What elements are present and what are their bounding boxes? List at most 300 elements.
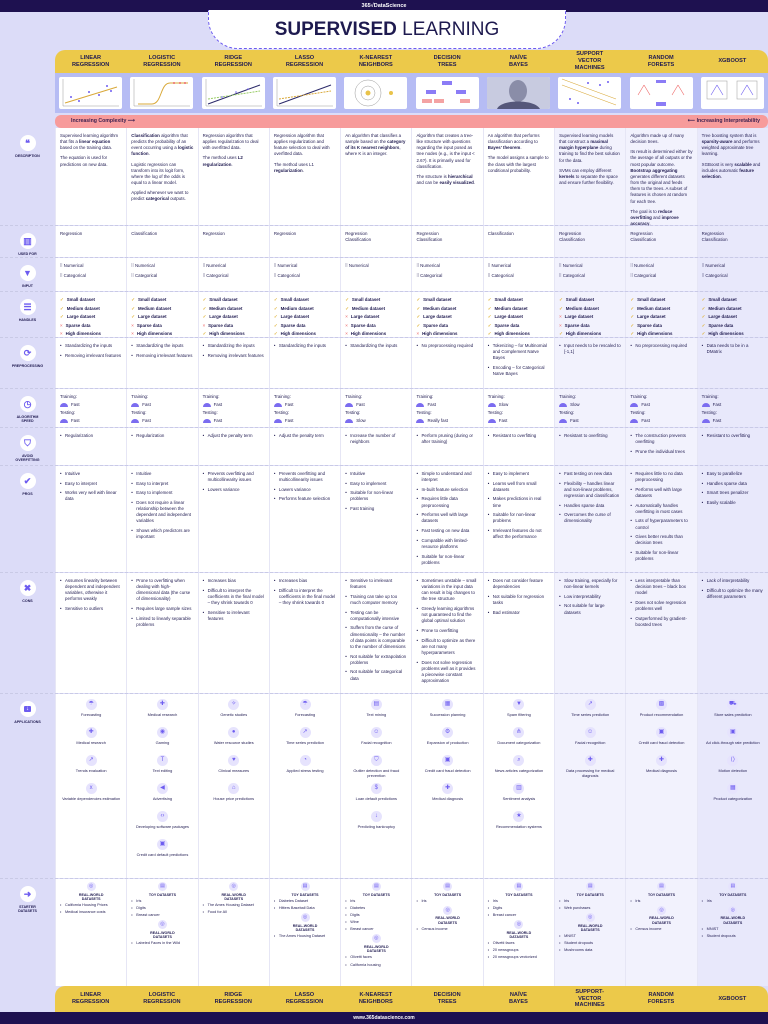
row: description: Regression algorithm that applies regularization to deal with overfitted data. [203, 133, 258, 150]
row: starter datasets: DATASETS [367, 949, 386, 953]
row: description: Supervised learning algorithm that fits a linear equation based on the training data. [60, 133, 118, 150]
thumbnails row [55, 73, 768, 113]
complexity / interpretability bar [55, 115, 768, 128]
row: algorithm speed: Testing: [416, 410, 432, 415]
row: cons: CONS [22, 599, 33, 603]
row: applications: ↓ [375, 813, 378, 819]
row: pros: Prevents overfitting and multicollinearity issues [208, 471, 254, 482]
row: handles: ✓ Small dataset [203, 297, 238, 302]
row: starter datasets: Breast cancer [136, 913, 160, 917]
row: pros: Easily scalable [707, 500, 736, 505]
row: algorithm speed: Slow [570, 402, 580, 407]
row: algorithm speed: Fast [641, 402, 650, 407]
row: pros: Learns well from small datasets [493, 481, 536, 492]
bottom header: algorithm names: NEIGHBORS [359, 999, 393, 1005]
row: algorithm speed: Training: [131, 394, 148, 399]
row: cons [0, 572, 768, 693]
row: starter datasets: Mushrooms data [564, 948, 592, 952]
row: starter datasets [0, 878, 768, 986]
row: starter datasets: REAL-WORLD [221, 892, 246, 896]
row: handles: × Sparse data [203, 323, 233, 328]
row: pros: Easy to implement [493, 471, 529, 476]
row: applications: Time series prediction [571, 712, 609, 717]
row: algorithm speed: Training: [274, 394, 291, 399]
row: applications: Expansion of production [427, 740, 468, 745]
row: handles: ✓ Large dataset [131, 314, 167, 319]
row: starter datasets: Breast cancer [493, 913, 516, 917]
footer: www.365datascience.com [353, 1015, 415, 1021]
row: pros: Fast testing on new data [564, 471, 612, 476]
row: handles: ✓ Small dataset [488, 297, 523, 302]
row: starter datasets: ▤ [303, 883, 307, 889]
row: applications: Succession planning [430, 712, 465, 717]
row: starter datasets: REAL-WORLD [649, 916, 674, 920]
complexity / interpretability bar: ⟵ Increasing Interpretability [688, 118, 760, 124]
row: cons: Prone to overfitting [421, 628, 458, 633]
row: description: Logistic regression can transform into its logit form, where the log of the odds is equal to a linear model. [131, 162, 185, 185]
row: pros: Fast training [350, 506, 374, 511]
row: starter datasets: REAL-WORLD [721, 916, 745, 920]
row: handles: ✓ Small dataset [274, 297, 309, 302]
row: starter datasets: Student dropouts [707, 934, 736, 938]
row: description: Algorithm made up of many decision trees. [630, 133, 684, 144]
row: applications: Credit card fraud detection [425, 768, 471, 773]
row: preprocessing: Encoding – for Categorical Naïve Bayes [493, 365, 545, 376]
row: starter datasets: Digits [350, 913, 360, 917]
bottom header: algorithm names: REGRESSION [215, 999, 252, 1005]
row: cons: Testing can be computationally intensive [350, 610, 399, 621]
row: used for [0, 225, 768, 257]
row: input: ⁞⁞ Numerical [630, 263, 654, 268]
row: cons: Prone to overfitting when dealing with high-dimensional data (the curse of dimensionality) [136, 578, 190, 601]
row: cons: Limited to linearly separable problems [136, 616, 191, 627]
header: algorithm names: RANDOM [648, 55, 674, 61]
row: applications: Recommendation systems [496, 824, 542, 829]
header: algorithm names: VECTOR [578, 58, 601, 64]
row: algorithm speed: ◷ [24, 398, 31, 408]
row: starter datasets: Iris [564, 899, 569, 903]
row: algorithm speed: Testing: [60, 410, 75, 415]
row: preprocessing [0, 337, 768, 388]
row: starter datasets: Iris [493, 899, 498, 903]
row: handles: ✓ Sparse data [488, 323, 519, 328]
row: applications: ⛟ [729, 701, 737, 707]
row: algorithm speed: Training: [702, 394, 719, 399]
row: description: SVMs can employ different kernels to separate the space and ensure further flexibility. [559, 168, 618, 185]
row: description [15, 128, 768, 226]
row: description: DESCRIPTION [15, 154, 40, 158]
row: handles: ✓ Sparse data [702, 323, 733, 328]
row: applications: Clinical measures [218, 768, 249, 773]
row: used for: Regression [345, 231, 367, 236]
row: preprocessing: Removing irrelevant features [136, 353, 192, 358]
row: pros: Easy to implement [136, 490, 172, 495]
row: algorithm speed: Fast [641, 418, 650, 423]
row: applications: Time series prediction [286, 740, 324, 745]
row: handles: × High dimensions [60, 331, 101, 336]
row: input: ⁞⁞ Numerical [488, 263, 511, 268]
row: avoid overfitting: Resistant to overfitting [493, 433, 536, 438]
row: handles: ✓ High dimensions [559, 331, 601, 336]
row: applications: Medical diagnosis [432, 796, 463, 801]
row: avoid overfitting: Resistant to overfitting [707, 433, 750, 438]
row: starter datasets: The Ames Housing Dataset [279, 934, 325, 938]
row: starter datasets: MNIST [564, 934, 576, 938]
bottom header: algorithm names: REGRESSION [143, 999, 181, 1005]
row: applications: Sentiment analysis [503, 796, 535, 801]
row: handles: ✓ Medium dataset [559, 306, 599, 311]
row: starter datasets: Digits [136, 906, 146, 910]
row: applications: ☺ [587, 729, 593, 735]
row: algorithm speed: Testing: [203, 410, 218, 415]
row: handles: ✓ Medium dataset [345, 306, 385, 311]
row: starter datasets: ◎ [445, 907, 450, 913]
row: starter datasets: ◎ [588, 914, 592, 920]
row: preprocessing: Standardizing the inputs [208, 343, 255, 348]
row: handles: ✓ Small dataset [60, 297, 95, 302]
bottom header: algorithm names: MACHINES [575, 1002, 605, 1008]
row: pros: Suitable for non-linear problems [635, 550, 678, 561]
row: starter datasets: REAL-WORLD [507, 931, 531, 935]
row: description: Its result is determined either by the average of all outputs or the most popular outcome. Bootstrap aggregating generates different datasets from the original and feeds them to the trees. A subset of features is chosen at random for each tree. [630, 149, 693, 204]
row: input: ⁞⁞ Categorical [488, 273, 514, 278]
header: algorithm names: REGRESSION [215, 62, 252, 68]
top bar [0, 0, 768, 12]
row: pros: Works very well with linear data [65, 490, 117, 501]
row: handles: ✓ Sparse data [416, 323, 448, 328]
row: algorithm speed: SPEED [21, 419, 34, 423]
row: applications: ▣ [445, 757, 450, 763]
row: handles: ✓ Medium dataset [131, 306, 171, 311]
row: cons: Training can take up too much computer memory [350, 594, 398, 605]
row: applications: ‹› [160, 813, 164, 819]
row: starter datasets: STARTER [19, 905, 36, 909]
row: avoid overfitting [0, 427, 768, 465]
row: input: INPUT [22, 284, 33, 288]
header: algorithm names: LINEAR [80, 55, 101, 61]
row: cons: Sensitive to irrelevant features [350, 578, 392, 589]
row: starter datasets: REAL-WORLD [435, 916, 460, 920]
row: applications: ● [232, 729, 236, 735]
header: algorithm names: XGBOOST [718, 58, 746, 64]
row: used for: USED FOR [18, 252, 37, 256]
row: starter datasets: Iris [707, 899, 712, 903]
row: algorithm speed: Testing: [702, 410, 717, 415]
row: pros: Intuitive [65, 471, 80, 476]
row: handles: ✓ Large dataset [630, 314, 666, 319]
row: applications: Forecasting [295, 712, 315, 717]
row: handles: ✓ Small dataset [702, 297, 737, 302]
row: used for: ▥ [23, 236, 32, 246]
row: applications: Medical diagnosis [646, 768, 677, 773]
row: preprocessing: Standardizing the inputs [350, 343, 397, 348]
title: SUPERVISED LEARNING [275, 19, 499, 40]
header: algorithm names: NAÏVE [510, 55, 527, 61]
row: cons: Slow training, especially for non-linear kernels [564, 578, 617, 589]
row: handles: ✓ Large dataset [60, 314, 95, 319]
row: description: An algorithm that classifies a sample based on the category of its K nearest neighbors, where K is an integer. [345, 133, 405, 156]
row: input: ⁞⁞ Categorical [630, 273, 656, 278]
row: applications: ★ [516, 813, 522, 819]
row: input: ⁞⁞ Numerical [203, 263, 226, 268]
row: handles: HANDLES [19, 318, 36, 322]
row: applications: ▦ [730, 785, 736, 791]
bottom header: algorithm names: LASSO [295, 992, 314, 998]
row: avoid overfitting: Adjust the penalty term [279, 433, 324, 438]
bottom header: algorithm names: RIDGE [224, 992, 242, 998]
row: handles: × Sparse data [559, 323, 590, 328]
row: handles: ✓ Large dataset [203, 314, 238, 319]
row: applications: Text editing [153, 768, 172, 773]
row: description: Classification algorithm that predicts the probability of an event occurring using a logistic function. [131, 133, 193, 156]
row: applications: Ad click-through rate prediction [706, 740, 760, 745]
row: input: ⁞⁞ Numerical [131, 263, 155, 268]
row: pros: Performs well with large datasets [635, 487, 682, 498]
row: used for: Regression [702, 231, 724, 236]
row: avoid overfitting: ⛉ [24, 438, 31, 448]
row: cons: Difficult to interpret the coefficients in the final model – they shrink towards 0 [279, 588, 335, 605]
row: handles: ✓ Medium dataset [702, 306, 742, 311]
row: pros: Simple to understand and interpret [421, 471, 472, 482]
row: handles: ✓ Medium dataset [488, 306, 528, 311]
row: starter datasets: Medical insurance costs [65, 910, 106, 914]
row: preprocessing: Standardizing the inputs [136, 343, 183, 348]
row: avoid overfitting: Regularization [65, 433, 93, 438]
row: avoid overfitting: Increase the number of neighbors [350, 433, 395, 444]
row: description: ❝ [25, 138, 30, 148]
row: preprocessing: Data needs to be in a DMatrix [707, 343, 748, 354]
row: input: ▼ [23, 268, 32, 278]
bottom header: algorithm names [55, 986, 768, 1012]
row: used for: Classification [559, 237, 585, 242]
row: avoid overfitting: The construction prevents overfitting [635, 433, 686, 444]
row: cons: Bad estimator [493, 610, 520, 615]
row: algorithm speed: Fast [285, 402, 293, 407]
header: algorithm names: DECISION [434, 55, 461, 61]
row: algorithm speed: Fast [285, 418, 293, 423]
row: cons: Sensitive to outliers [65, 606, 103, 611]
row: handles: × High dimensions [131, 331, 172, 336]
row: handles: × High dimensions [416, 331, 457, 336]
row: handles: × Sparse data [131, 323, 162, 328]
row: pros: PROS [22, 492, 33, 496]
row: applications: Spam filtering [507, 712, 531, 717]
row: starter datasets: Food for All [208, 910, 227, 914]
row: input: ⁞⁞ Categorical [702, 273, 728, 278]
row: starter datasets: Diabetes [350, 906, 365, 910]
row: cons: Outperformed by gradient-boosted trees [635, 616, 687, 627]
row: algorithm speed: Fast [570, 418, 579, 423]
row: pros: Easy to interpret [65, 481, 97, 486]
row: handles: ✓ High dimensions [274, 331, 316, 336]
header: algorithm names: LOGISTIC [149, 55, 175, 61]
row: applications: ▣ [730, 729, 736, 735]
row: handles: ✓ Medium dataset [203, 306, 242, 311]
row: algorithm speed: Training: [60, 394, 77, 399]
row: pros: Lots of hyperparameters to control [635, 518, 688, 530]
row: starter datasets: Labeled Faces in the Wild [136, 941, 180, 945]
row: algorithm speed: Training: [203, 394, 220, 399]
row: description: The goal is to reduce overfitting and improve accuracy. [630, 209, 679, 226]
row: algorithm speed: Training: [630, 394, 647, 399]
row: algorithm speed: Training: [416, 394, 433, 399]
row: starter datasets: REAL-WORLD [79, 892, 103, 896]
row: algorithm speed: ALGORITHM [17, 415, 38, 419]
row: handles: ✓ High dimensions [702, 331, 744, 336]
row: used for: Regression [274, 231, 296, 236]
row: starter datasets: 20 newsgroups [493, 948, 519, 952]
row: cons: Does not solve regression problems well [635, 600, 686, 611]
row: starter datasets: REAL-WORLD [293, 924, 317, 928]
row: cons: Increases bias [208, 578, 236, 583]
row: applications: Loan default predictions [356, 796, 397, 801]
row: starter datasets: ◎ [89, 883, 93, 889]
complexity / interpretability bar: Increasing Complexity ⟶ [71, 118, 135, 124]
row: pros: Handles sparse data [707, 481, 747, 486]
row: pros [0, 465, 768, 572]
row: description: XGBoost is very scalable and includes automatic feature selection. [702, 162, 760, 179]
row: input: ⁞⁞ Numerical [416, 263, 440, 268]
top bar: 365√DataScience [362, 3, 406, 9]
row: pros: Performs well with large datasets [421, 512, 468, 523]
row: pros: Irrelevant features do not affect the performance [493, 528, 542, 539]
row: applications: ↓ [26, 706, 29, 712]
row: handles: ✓ High dimensions [488, 331, 530, 336]
row: avoid overfitting: Prune the individual trees [635, 449, 685, 454]
row: input: ⁞⁞ Categorical [559, 273, 585, 278]
row: description: Algorithm that creates a tree-like structure with questions regarding the input posed as tree nodes (e.g., is the input < 2.6?). It is primarily used for classification. [416, 133, 475, 169]
row: cons: Difficult to optimize the many different parameters [707, 588, 763, 599]
bottom header: algorithm names: K-NEAREST [360, 992, 392, 998]
row: applications: Developing software packages [136, 824, 189, 829]
row: handles [0, 291, 768, 337]
row: starter datasets: DATASETS [652, 921, 671, 925]
row: applications: ◉ [160, 729, 165, 735]
row: applications: ▤ [373, 701, 379, 707]
row: starter datasets: ▤ [374, 883, 379, 889]
row: description: Tree boosting system that is sparsity-aware and performs weighted approximate tree learning. [702, 133, 760, 156]
row: starter datasets: Olivetti faces [493, 941, 515, 945]
row: preprocessing: Removing irrelevant features [65, 353, 121, 358]
row: applications: Text mining [366, 712, 386, 717]
row: used for: Regression [630, 231, 653, 236]
row: pros: Makes predictions in real time [493, 496, 541, 508]
row: handles: ✓ Large dataset [416, 314, 452, 319]
row: used for: Classification [131, 231, 157, 236]
row: starter datasets: ▤ [588, 883, 593, 889]
row: applications: ▣ [659, 729, 664, 735]
bottom header: algorithm names: VECTOR [578, 996, 601, 1002]
bottom header: algorithm names: FORESTS [648, 999, 674, 1005]
row: starter datasets: Iris [421, 899, 427, 903]
row: starter datasets: ▤ [517, 883, 521, 889]
row: applications: Trends evaluation [76, 768, 107, 773]
row: starter datasets: The Ames Housing Dataset [208, 903, 254, 907]
row: input: ⁞⁞ Categorical [203, 273, 228, 278]
row: applications: ▦ [445, 701, 450, 707]
row: starter datasets: Iris [635, 899, 640, 903]
row: input: ⁞⁞ Categorical [416, 273, 442, 278]
row: starter datasets: ▤ [659, 883, 664, 889]
row: applications: ✚ [445, 785, 450, 791]
row: algorithm speed: Testing: [630, 410, 646, 415]
row: pros: Compatible with limited-resource platforms [421, 538, 468, 549]
row: pros: Lowers variance [208, 487, 240, 492]
row: algorithm speed: Testing: [488, 410, 503, 415]
bottom header: algorithm names: BAYES [509, 999, 528, 1005]
header: algorithm names: FORESTS [648, 62, 674, 68]
row: applications: ♥ [232, 757, 236, 763]
row: cons: Greedy learning algorithms not guaranteed to find the global optimal solution [421, 606, 474, 623]
row: starter datasets: MNIST [707, 927, 718, 931]
row: starter datasets: Iris [350, 899, 355, 903]
bottom header: algorithm names: REGRESSION [72, 999, 109, 1005]
row: pros: Suitable for non-linear problems [493, 512, 536, 523]
row: algorithm speed: Fast [713, 418, 721, 423]
row: cons: Sometimes unstable – small variations in the input data can result in big changes to the tree structure [421, 578, 476, 601]
row: starter datasets: Census income [421, 927, 448, 931]
row: applications: Document categorization [497, 740, 540, 745]
row: starter datasets: DATASETS [581, 928, 600, 932]
row: input: ⁞⁞ Categorical [274, 273, 300, 278]
row: algorithm speed: Testing: [131, 410, 146, 415]
row: applications: ⚙ [445, 729, 450, 735]
row: starter datasets: DATASETS [723, 921, 742, 925]
row: pros: Prevents overfitting and multicollinearity issues [279, 471, 325, 482]
row: starter datasets: Digits [493, 906, 502, 910]
row: used for: Regression [60, 231, 82, 236]
row: algorithm speed: Testing: [559, 410, 574, 415]
row: starter datasets: Breast cancer [350, 927, 374, 931]
row: handles: ✓ Small dataset [559, 297, 594, 302]
row: applications: T [161, 757, 164, 763]
row: cons: Less interpretable than decision trees – black box model [635, 578, 686, 595]
row: pros: Flexibility – handles linear and non-linear problems, regression and classification [564, 481, 619, 498]
row: applications: $ [375, 785, 378, 791]
row: handles: × Large dataset [345, 314, 379, 319]
row: applications: ↗ [303, 729, 308, 735]
row: handles: ☰ [23, 302, 32, 312]
row: pros: Performs feature selection [279, 496, 330, 501]
row: applications: ⌕ [517, 757, 521, 763]
row: handles: ✓ Medium dataset [60, 306, 100, 311]
row: starter datasets: ▤ [160, 883, 165, 889]
row: preprocessing: PREPROCESSING [12, 364, 43, 368]
row: applications: ✚ [160, 701, 165, 707]
row: applications: ☂ [88, 701, 94, 707]
row: description: Applied whenever we want to predict categorical outputs. [131, 190, 188, 201]
row: description: Regression algorithm that applies regularization and feature selection to deal with overfitted data. [274, 133, 330, 156]
row: pros: Requires little data preprocessing [421, 496, 458, 508]
row: description: Supervised learning models that construct a maximal margin hyperplane during training to find the best solution for the data. [559, 133, 620, 163]
row: algorithm speed: Fast [427, 402, 436, 407]
row: description: The structure is hierarchical and can be easily visualized. [416, 174, 475, 185]
row: applications: Applied stress testing [287, 768, 324, 773]
row: starter datasets: DATASETS [224, 897, 243, 901]
row: applications: ◔ [303, 757, 307, 763]
row: algorithm speed: Really fast [427, 418, 448, 423]
row: handles: ✓ Large dataset [274, 314, 309, 319]
row: applications: ☂ [302, 701, 308, 707]
row: starter datasets: ◎ [232, 883, 236, 889]
row: handles: ✓ Large dataset [488, 314, 523, 319]
row: pros: In-built feature selection [421, 487, 468, 492]
row: starter datasets: California housing [350, 963, 381, 967]
row: handles: ✓ Small dataset [630, 297, 665, 302]
bottom header: algorithm names: TREES [438, 999, 456, 1005]
row: algorithm speed: Fast [71, 418, 80, 423]
row: preprocessing: Standardizing the inputs [279, 343, 326, 348]
